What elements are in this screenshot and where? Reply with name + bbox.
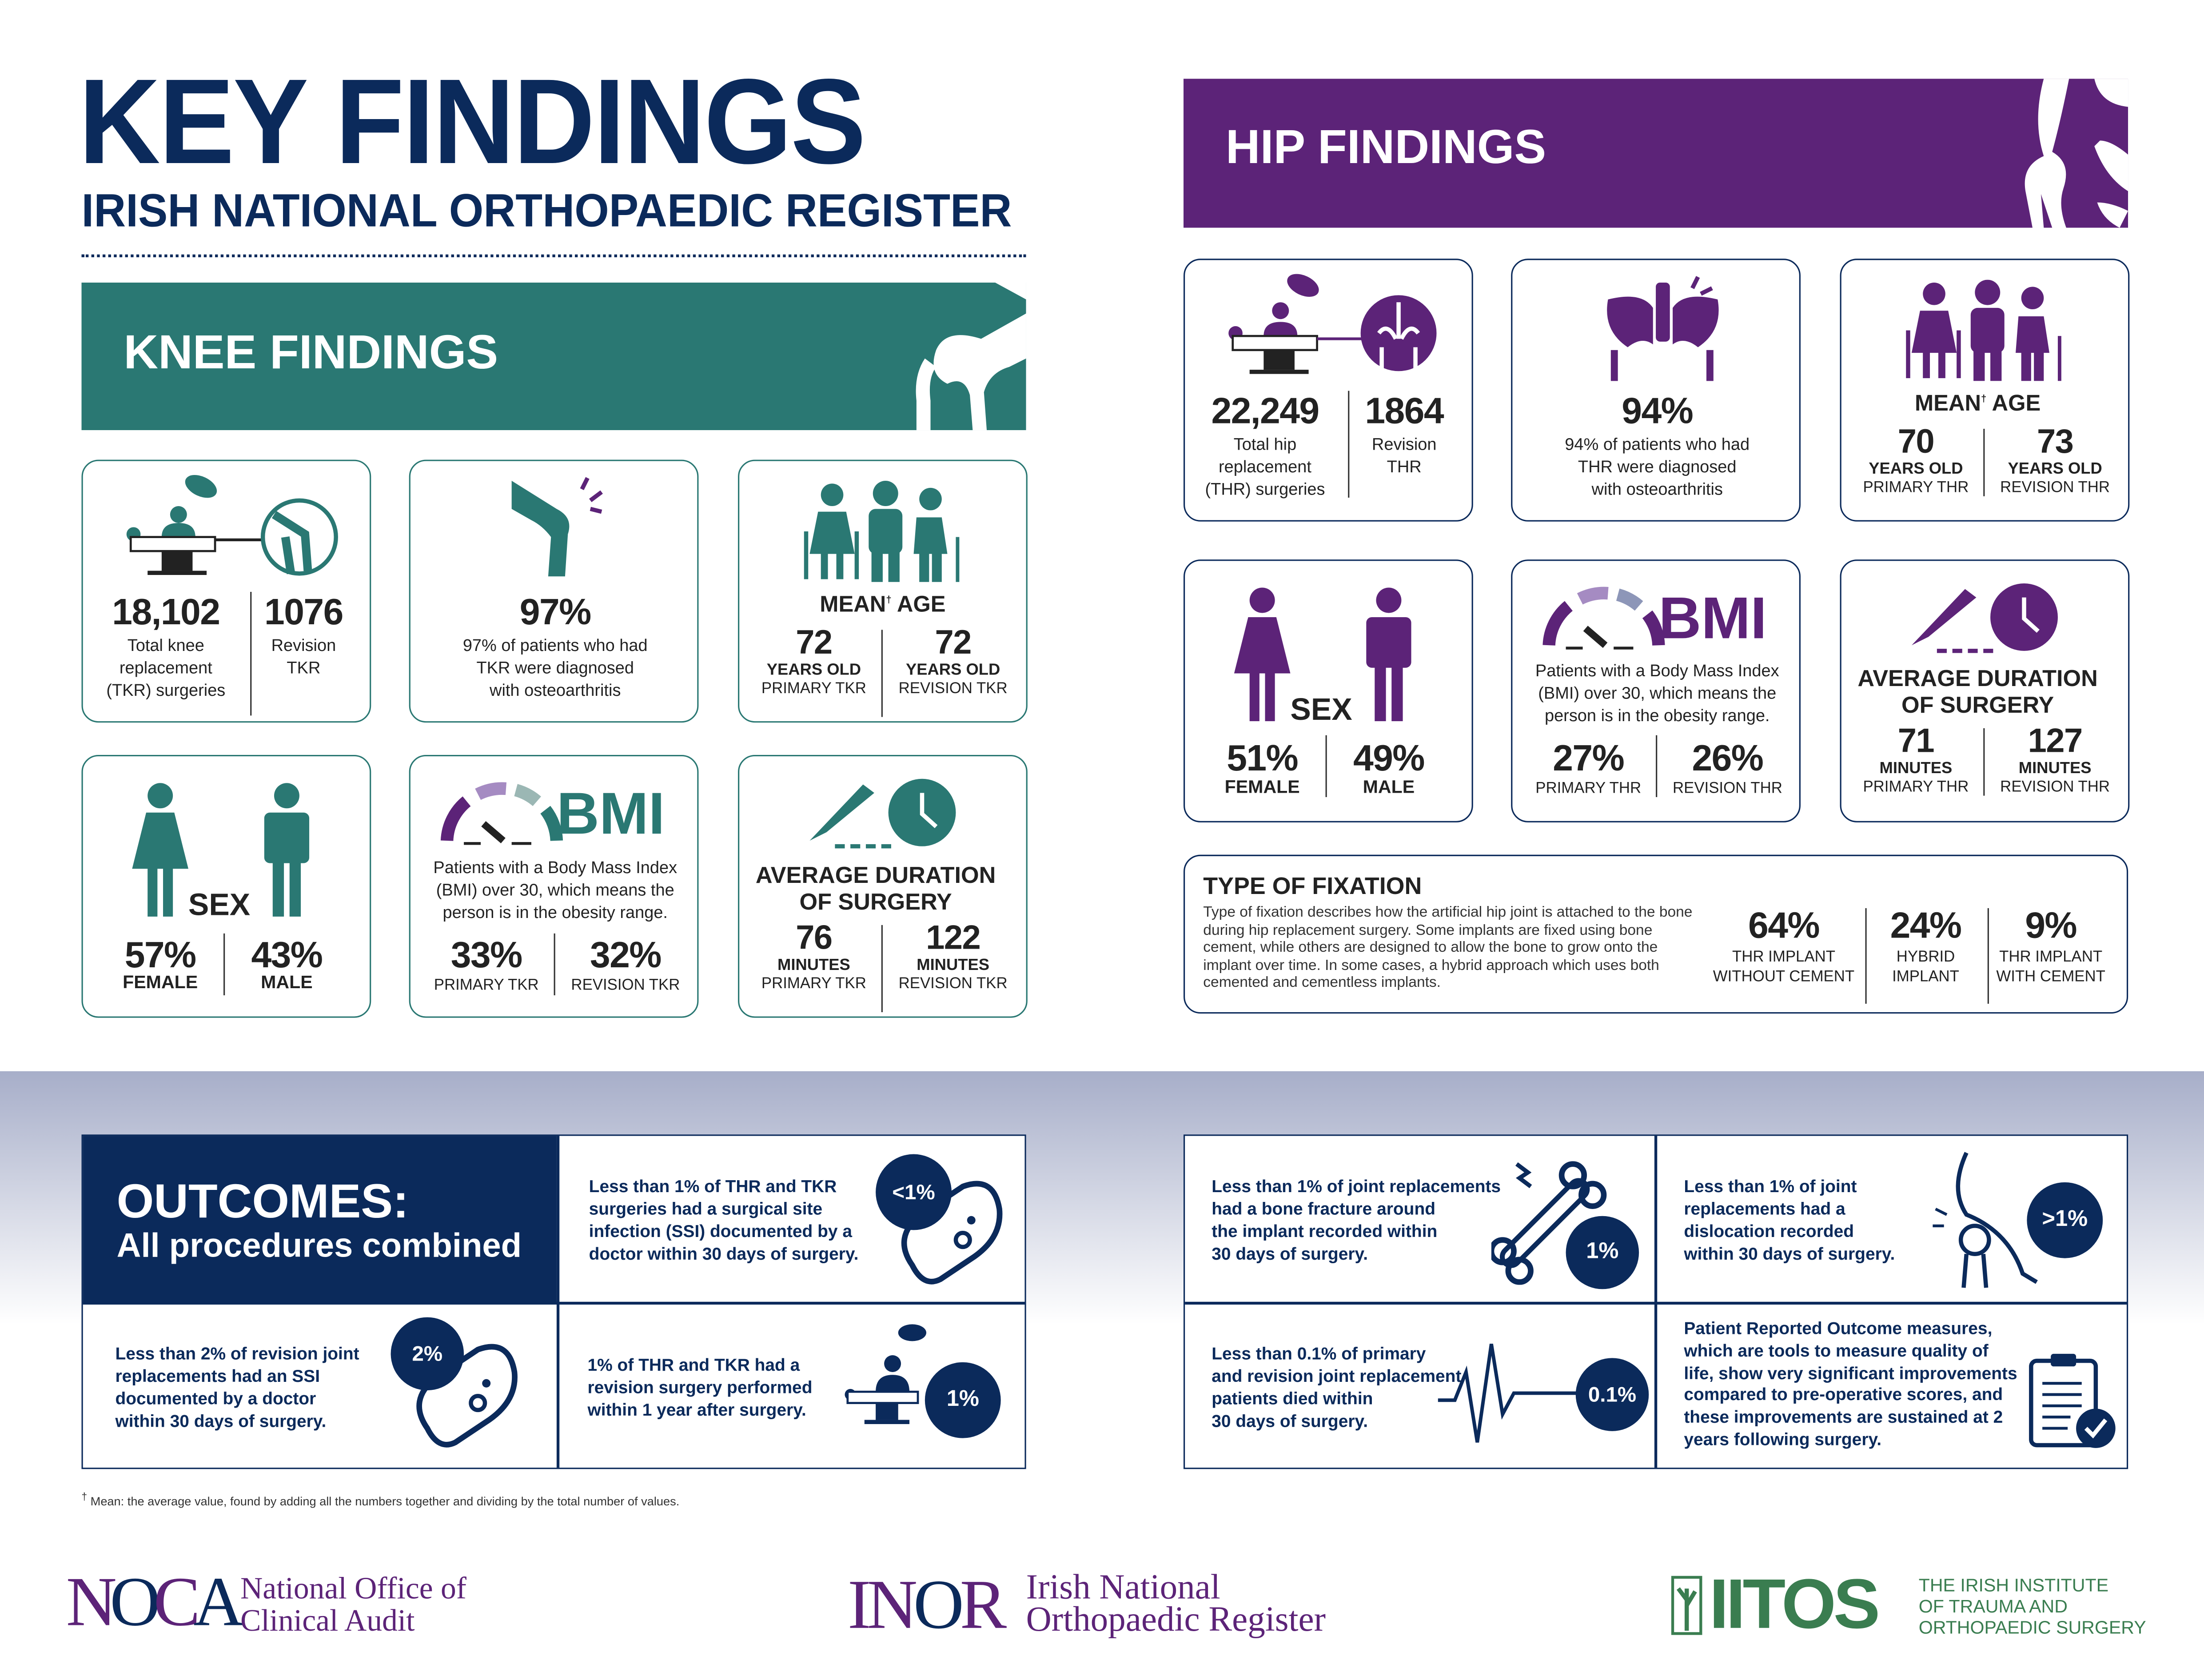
knee card: mean age: 72 (796, 624, 832, 662)
hip card: BMI: (BMI) over 30, which means the (1538, 683, 1776, 703)
hip card: total THR: 1864 (1365, 389, 1443, 431)
knee card: total TKR: 1076 (264, 591, 343, 633)
hip card: BMI: BMI (1658, 585, 1767, 651)
knee card: mean age: 72 (935, 624, 971, 662)
knee card: sex: 43% (251, 934, 322, 976)
outcome: mortality 0.1%: and revision joint replacement (1212, 1366, 1461, 1386)
outcome: revision SSI 2%: replacements had an SSI (115, 1366, 320, 1386)
hip card: sex: MALE (1363, 776, 1415, 797)
hip card: duration: AVERAGE DURATION (1857, 666, 2098, 692)
knee card: osteoarthritis (409, 460, 698, 722)
logo: INOR: Orthopaedic Register (1026, 1601, 1326, 1639)
logo: INOR: Irish National (1026, 1569, 1220, 1607)
hip card: BMI: Patients with a Body Mass Index (1535, 661, 1779, 680)
outcome: dislocation >1%: within 30 days of surgery. (1684, 1244, 1895, 1264)
logo: IITOS (1670, 1569, 2141, 1639)
hip card: total THR: Revision (1372, 435, 1437, 454)
hip card: total THR: Total hip (1234, 435, 1296, 454)
outcome: SSI <1% (561, 1136, 1024, 1302)
outcome: revision 1%: 1% (947, 1388, 979, 1412)
outcome: mortality 0.1% (1185, 1305, 1654, 1468)
hip card: osteoarthritis (1511, 259, 1801, 522)
hip card: mean age: PRIMARY THR (1863, 479, 1969, 496)
knee card: BMI (409, 755, 698, 1018)
knee card: sex: MALE (261, 971, 313, 993)
knee card: mean age: MEAN† AGE (820, 593, 946, 617)
hip card: duration: 71 (1898, 722, 1934, 761)
knee card: mean age: REVISION TKR (899, 680, 1008, 697)
icon: elderly people (1903, 280, 2072, 381)
icon: scalpel and clock (807, 776, 961, 849)
logo: INOR (848, 1569, 1367, 1648)
knee card: sex: 57% (125, 934, 196, 976)
knee card: osteoarthritis: with osteoarthritis (490, 680, 621, 700)
knee card: total TKR (82, 460, 371, 722)
hip card: duration (1840, 559, 2129, 822)
hip card: osteoarthritis: 94% (1622, 389, 1693, 431)
outcome: mortality 0.1%: 0.1% (1588, 1383, 1636, 1406)
hip banner (1184, 79, 2128, 228)
knee card: total TKR: Total knee (128, 635, 204, 655)
knee banner (82, 283, 1026, 430)
outcome: fracture 1%: had a bone fracture around (1212, 1199, 1435, 1219)
outcome: fracture 1%: 1% (1586, 1240, 1618, 1264)
knee card: BMI: 33% (451, 934, 522, 976)
hip card: duration: REVISION THR (2000, 779, 2110, 796)
icon: scalpel and clock (1909, 581, 2064, 654)
hip card: sex: 51% (1227, 737, 1298, 779)
knee card: BMI: person is in the obesity range. (442, 902, 668, 922)
knee card: duration (738, 755, 1028, 1018)
stats: 18,102 (112, 591, 219, 633)
logo: NOCA: National Office of (240, 1570, 466, 1605)
panel: type of fixation: IMPLANT (1892, 969, 1959, 986)
hip card: BMI: REVISION THR (1673, 780, 1782, 797)
hip card: duration: 127 (2028, 722, 2082, 761)
panel: type of fixation (1184, 855, 2128, 1014)
hip card: mean age: REVISION THR (2000, 479, 2110, 496)
logo: NOCA (66, 1566, 488, 1645)
hip card: mean age: 70 (1898, 423, 1934, 461)
panel: type of fixation: TYPE OF FIXATION (1203, 873, 1422, 900)
hip card: duration: PRIMARY THR (1863, 779, 1969, 796)
hip card: total THR: 22,249 (1211, 389, 1319, 431)
knee card: total TKR: Revision (271, 635, 336, 655)
outcome: revision 1%: 1% of THR and TKR had a (588, 1355, 800, 1375)
panel: type of fixation: 24% (1890, 904, 1961, 946)
knee card: total TKR: TKR (287, 658, 320, 678)
hip card: sex: SEX (1290, 692, 1352, 727)
panel: type of fixation: HYBRID (1897, 949, 1955, 966)
icon: BMI gauge (1541, 586, 1667, 651)
panel: type of fixation: Type of fixation describes how the artificial hip joint is attached to the bone during hip replacement surgery. Some implants are fixed using bone cement, while others are designed to allow the bone to grow onto the implant over time. In some cases, a hybrid approach which uses both cemented and cementless implants. (1203, 904, 1692, 992)
hip card: osteoarthritis: with osteoarthritis (1592, 479, 1723, 499)
bottom gradient background (0, 1071, 2204, 1324)
knee card: duration: MINUTES (777, 958, 850, 974)
outcome: PROMs (1657, 1305, 2127, 1468)
outcome: PROMs: which are tools to measure quality of (1684, 1341, 1989, 1361)
hip card: mean age: YEARS OLD (2008, 461, 2102, 478)
knee card: BMI: PRIMARY TKR (434, 977, 539, 994)
outcome: mortality 0.1%: Less than 0.1% of primary (1212, 1344, 1426, 1364)
knee card: duration: REVISION TKR (899, 976, 1008, 993)
outcome: dislocation >1%: >1% (2042, 1208, 2088, 1232)
hip card: BMI: 27% (1553, 737, 1624, 779)
panel: type of fixation: 64% (1748, 904, 1819, 946)
knee card: BMI: Patients with a Body Mass Index (433, 858, 677, 877)
outcomes heading: All procedures combined (117, 1227, 522, 1265)
outcome: SSI <1%: doctor within 30 days of surgery. (589, 1244, 858, 1264)
knee card: duration: OF SURGERY (799, 890, 952, 915)
outcome: dislocation >1%: dislocation recorded (1684, 1221, 1854, 1241)
knee card: mean age (738, 460, 1028, 722)
knee card: duration: MINUTES (917, 958, 989, 974)
outcome: revision SSI 2%: Less than 2% of revision joint (115, 1344, 359, 1364)
hip card: mean age: YEARS OLD (1869, 461, 1963, 478)
outcome: SSI <1%: Less than 1% of THR and TKR (589, 1177, 837, 1196)
hip card: mean age: MEAN† AGE (1915, 392, 2041, 416)
outcome: PROMs: these improvements are sustained at 2 (1684, 1408, 2003, 1427)
panel: type of fixation: WITH CEMENT (1996, 969, 2105, 986)
outcome: PROMs: compared to pre-operative scores, and (1684, 1385, 2003, 1405)
panel: type of fixation: 9% (2025, 904, 2076, 946)
icon: female and male (1227, 586, 1424, 727)
hip card: osteoarthritis: THR were diagnosed (1578, 457, 1737, 477)
outcome: mortality 0.1%: 30 days of surgery. (1212, 1412, 1368, 1431)
outcome: revision SSI 2% (83, 1305, 557, 1468)
outcomes heading (83, 1136, 557, 1303)
title: KEY FINDINGS (79, 55, 865, 190)
outcome: revision 1%: within 1 year after surgery. (588, 1400, 806, 1420)
icon: clipboard (2025, 1349, 2121, 1453)
outcome: PROMs: life, show very significant improvements (1684, 1363, 2017, 1383)
outcome: dislocation >1% (1657, 1136, 2127, 1302)
hip heading: HIP FINDINGS (1226, 121, 1546, 174)
icon: surgery to knee (122, 470, 347, 582)
outcomes heading: OUTCOMES: (117, 1175, 409, 1229)
knee card: total TKR: replacement (120, 658, 212, 678)
hip card: duration: MINUTES (1880, 761, 1952, 778)
outcome: SSI <1%: surgeries had a surgical site (589, 1199, 822, 1219)
knee card: BMI: REVISION TKR (571, 977, 680, 994)
hip card: osteoarthritis: 94% of patients who had (1565, 435, 1750, 454)
hip card: BMI: PRIMARY THR (1535, 780, 1641, 797)
outcome: revision SSI 2%: 2% (412, 1342, 442, 1366)
logo: IITOS: OF TRAUMA AND (1919, 1596, 2068, 1616)
hip card: mean age: 73 (2037, 423, 2073, 461)
icon: female and male (125, 782, 322, 922)
hip card: total THR: (THR) surgeries (1205, 479, 1325, 499)
outcome: SSI <1%: <1% (892, 1180, 935, 1204)
knee card: osteoarthritis: 97% (520, 591, 591, 633)
subtitle: IRISH NATIONAL ORTHOPAEDIC REGISTER (82, 184, 1012, 236)
panel: type of fixation: WITHOUT CEMENT (1713, 969, 1854, 986)
knee heading: KNEE FINDINGS (124, 326, 498, 379)
icon: pelvis (1600, 274, 1726, 384)
outcome: revision 1% (561, 1305, 1024, 1468)
logo: IITOS: ORTHOPAEDIC SURGERY (1919, 1616, 2146, 1638)
hip card: sex: 49% (1353, 737, 1424, 779)
logo: INOR: INOR (848, 1564, 1003, 1644)
hip card: mean age (1840, 259, 2129, 522)
hip card: BMI: 26% (1692, 737, 1763, 779)
outcome: PROMs: years following surgery. (1684, 1430, 1881, 1449)
logo: NOCA: Clinical Audit (240, 1603, 415, 1638)
outcome: mortality 0.1%: patients died within (1212, 1389, 1373, 1409)
hip card: total THR (1184, 259, 1473, 522)
icon: surgery to hip (1224, 268, 1449, 381)
outcome: fracture 1%: Less than 1% of joint replacements (1212, 1177, 1501, 1196)
icon: elderly people (801, 481, 970, 582)
knee card: osteoarthritis: TKR were diagnosed (476, 658, 634, 678)
hip card: total THR: replacement (1219, 457, 1311, 477)
panel: type of fixation: THR IMPLANT (1732, 949, 1835, 966)
knee card: duration: PRIMARY TKR (761, 976, 866, 993)
outcome: fracture 1% (1185, 1136, 1654, 1302)
outcome: revision SSI 2%: documented by a doctor (115, 1389, 316, 1409)
outcome: dislocation >1%: replacements had a (1684, 1199, 1845, 1219)
logo: NOCA: NOCA (66, 1562, 237, 1640)
panel: outcomes left grid (82, 1134, 1026, 1469)
knee card: mean age: PRIMARY TKR (761, 680, 866, 697)
logo: IITOS: THE IRISH INSTITUTE (1919, 1575, 2108, 1596)
knee card: sex (82, 755, 371, 1018)
outcome: fracture 1%: the implant recorded within (1212, 1221, 1437, 1241)
icon: BMI gauge (438, 782, 565, 846)
outcome: revision SSI 2%: within 30 days of surgery. (115, 1412, 326, 1431)
hip card: sex (1184, 559, 1473, 822)
knee card: osteoarthritis: 97% of patients who had (463, 635, 648, 655)
knee card: duration: AVERAGE DURATION (756, 863, 996, 889)
knee card: duration: 122 (926, 919, 980, 958)
hip card: duration: OF SURGERY (1901, 693, 2054, 718)
hip card: total THR: THR (1387, 457, 1422, 477)
knee card: BMI: 32% (590, 934, 661, 976)
knee card: BMI: (BMI) over 30, which means the (436, 880, 674, 900)
knee card: mean age: YEARS OLD (906, 662, 1000, 679)
logo: IITOS: IITOS (1709, 1564, 1877, 1644)
icon: knee pain (500, 475, 613, 581)
outcome: PROMs: Patient Reported Outcome measures, (1684, 1319, 1992, 1338)
knee card: mean age: YEARS OLD (767, 662, 861, 679)
outcome: revision 1%: revision surgery performed (588, 1378, 812, 1397)
knee card: sex: SEX (188, 887, 250, 922)
hip card: BMI: person is in the obesity range. (1545, 706, 1770, 726)
hip card: duration: MINUTES (2019, 761, 2091, 778)
footnote: † Mean: the average value, found by adding all the numbers together and dividing by the total number of values. (82, 1492, 679, 1508)
outcome: SSI <1%: infection (SSI) documented by a (589, 1221, 852, 1241)
knee card: BMI: BMI (557, 780, 665, 846)
knee card: total TKR: (TKR) surgeries (106, 680, 225, 700)
outcome: fracture 1%: 30 days of surgery. (1212, 1244, 1368, 1264)
hip card: sex: FEMALE (1225, 776, 1300, 797)
hip card: BMI (1511, 559, 1801, 822)
knee card: duration: 76 (796, 919, 832, 958)
panel: type of fixation: THR IMPLANT (1999, 949, 2102, 966)
panel: outcomes right grid (1184, 1134, 2128, 1469)
outcome: dislocation >1%: Less than 1% of joint (1684, 1177, 1857, 1196)
knee card: sex: FEMALE (123, 971, 198, 993)
